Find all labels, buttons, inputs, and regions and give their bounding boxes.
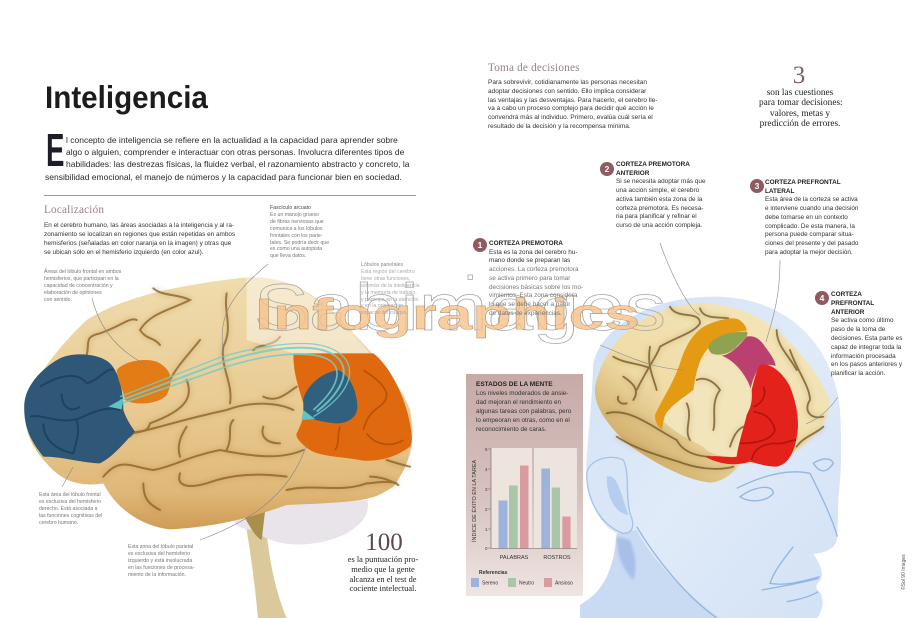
step 4: corteza prefrontal anterior: Se activa como último — [831, 317, 894, 324]
step 1: corteza premotora: de datos de experiencias. — [489, 310, 562, 317]
step 4: corteza prefrontal anterior: ANTERIOR — [831, 309, 864, 316]
text: toma de decisiones: Para sobrevivir, cotidianamente las personas necesitan — [488, 79, 647, 86]
small marker square — [468, 275, 472, 280]
step 2: corteza premotora anterior: 2 — [605, 164, 609, 174]
step 4: corteza prefrontal anterior: paso de la toma de — [831, 326, 885, 333]
caption: áreas del lóbulo frontal: capacidad de concentración y — [44, 283, 113, 289]
text: localización — [44, 222, 235, 256]
region: lateral prefrontal magenta — [722, 336, 776, 388]
sulci — [607, 307, 823, 469]
parietal orange area — [293, 353, 412, 461]
plot background — [491, 448, 532, 548]
caption: fascículo arcuato: Fascículo arcuato — [270, 205, 311, 211]
illustration: left brain with stem and cerebellum — [24, 277, 412, 618]
caption: lóbulo frontal derecho: cerebro humano. — [39, 520, 78, 526]
leader lines — [62, 243, 838, 540]
caption: áreas del lóbulo frontal: elaboración de opiniones — [44, 290, 102, 296]
step 3: corteza prefrontal lateral: 3 — [755, 181, 759, 191]
callout: 100: 100 — [365, 529, 403, 556]
chart title and text: dad mejoran el rendimiento en — [476, 399, 561, 406]
step 3: corteza prefrontal lateral: para adoptar la mejor decisión. — [765, 249, 853, 256]
step 4: corteza prefrontal anterior: capaz de integrar toda la — [831, 344, 901, 351]
intro text: sensibilidad emocional, el manejo de números y la capacidad para funcionar bien en sociedad. — [45, 172, 402, 182]
caption: lóbulos parietales: espacial del cuerpo. — [361, 310, 407, 316]
chart title and text: Los niveles moderados de ansie- — [476, 390, 568, 397]
divider rule — [44, 195, 416, 196]
chart panel — [466, 374, 583, 596]
caption: fascículo arcuato: que lleva datos. — [270, 253, 306, 259]
caption: fascículo arcuato — [270, 205, 329, 259]
chart: Estados de la mente: 4 — [485, 467, 488, 473]
text: localización: En el cerebro humano, las áreas asociadas a la inteligencia y al ra- — [44, 222, 234, 229]
callout: 3: 3 — [793, 62, 805, 89]
y axis label: ÍNDICE DE ÉXITO EN LA TAREA — [471, 459, 478, 542]
step 3: corteza prefrontal lateral: LATERAL — [765, 188, 794, 195]
illustration: right brain with coloured regions — [595, 303, 829, 483]
chart: Estados de la mente — [466, 374, 583, 596]
step 4: corteza prefrontal anterior: PREFRONTAL — [831, 300, 874, 307]
heading: Toma de decisiones: Toma de decisiones — [488, 62, 580, 74]
chart: Estados de la mente: 3 — [485, 487, 488, 493]
chart: Estados de la mente: 2 — [485, 507, 488, 513]
caption: fascículo arcuato: comunica a los lóbulos — [270, 226, 322, 232]
step 1: corteza premotora: acciones. La corteza premotora — [489, 266, 579, 273]
inner cream lobes — [663, 355, 750, 457]
callout text: 100: es la puntuación pro- — [348, 555, 418, 564]
caption: lóbulos parietales: además de la inteligencia — [361, 283, 420, 289]
step 3: corteza prefrontal lateral: complicado. De esta manera, la — [765, 223, 855, 230]
step 4: corteza prefrontal anterior: en los pasos anteriores y — [831, 361, 902, 368]
caption: áreas del lóbulo frontal: Áreas del lóbulo frontal en ambos — [44, 269, 121, 275]
intro text — [45, 135, 410, 182]
step 2: corteza premotora anterior: Si se necesita adoptar más que — [616, 178, 706, 185]
intro text: habilidades: las destrezas físicas, la fluidez verbal, el razonamiento abstracto y concreto, la — [66, 159, 409, 169]
chart title and text: algunas tareas con palabras, pero — [476, 408, 571, 415]
step 1: corteza premotora: CORTEZA PREMOTORA — [489, 240, 563, 247]
caption: lóbulo parietal izquierdo: izquierdo y está involucrada — [128, 558, 192, 564]
callout text: 100: cociente intelectual. — [350, 584, 416, 593]
intro text: algo o alguien, comprender e interactuar con otras personas. Involucra diferentes tipos de — [66, 147, 404, 157]
photo credit: ©Sol 90 Images — [901, 554, 907, 590]
parietal blue area — [303, 370, 357, 423]
caption: fascículo arcuato: Es un manojo grueso — [270, 212, 319, 218]
step 4: corteza prefrontal anterior: información procesada — [831, 353, 896, 360]
caption: lóbulo frontal derecho: Esta área del lóbulo frontal — [39, 492, 101, 498]
step 2: corteza premotora anterior: una acción simple, el cerebro — [616, 187, 699, 194]
caption: fascículo arcuato: es como una autopista — [270, 246, 322, 252]
caption: lóbulos parietales: Esta región del cerebro — [361, 269, 415, 275]
illustration: head profile — [580, 297, 841, 618]
step 3: corteza prefrontal lateral: CORTEZA PREFRONTAL — [765, 179, 841, 186]
legend: Referencias — [479, 570, 508, 576]
caption: fascículo arcuato: tales. Se podría decir que — [270, 240, 329, 246]
bars — [498, 466, 571, 548]
face details — [637, 459, 837, 618]
step 1: corteza premotora: 1 — [478, 240, 482, 250]
step 4: corteza prefrontal anterior: 4 — [820, 293, 824, 303]
step 2: corteza premotora anterior: ria para planificar y refinar el — [616, 213, 697, 220]
x axis labels: ROSTROS — [543, 555, 571, 561]
callout text: 3: son las cuestiones — [767, 88, 833, 98]
step 1: corteza premotora: mano donde se preparan las — [489, 257, 570, 264]
callout text: 100: alcanza en el test de — [350, 575, 416, 584]
callout text: 3: valores, metas y — [770, 109, 830, 119]
legend: Ansioso — [555, 580, 573, 586]
heading: Localización: Localización — [44, 204, 104, 216]
chart: Estados de la mente: 0 — [485, 546, 488, 552]
caption: áreas del lóbulo frontal: hemisferios, que participan en la — [44, 276, 119, 282]
step 1: corteza premotora — [473, 238, 583, 317]
title: Inteligencia — [45, 79, 208, 115]
caption: fascículo arcuato: de fibras nerviosas que — [270, 219, 324, 225]
step 4: corteza prefrontal anterior: CORTEZA — [831, 291, 862, 298]
watermark: Infographics — [255, 290, 640, 339]
cerebellum — [232, 500, 368, 544]
step 4: corteza prefrontal anterior — [815, 291, 902, 377]
caption: lóbulo frontal derecho: las funciones cognitivas del — [39, 513, 102, 519]
step 3: corteza prefrontal lateral: Esta área de la corteza se activa — [765, 196, 858, 203]
caption: lóbulos parietales: y en la orientación — [361, 303, 403, 309]
haze under watermark — [247, 278, 370, 353]
chart title and text: ESTADOS DE LA MENTE — [476, 381, 553, 388]
step 2: corteza premotora anterior — [600, 161, 706, 229]
step 1: corteza premotora: Esta es la zona del cerebro hu- — [489, 249, 577, 256]
watermark: Sabimages — [254, 270, 666, 344]
caption: fascículo arcuato: frontales con los parie- — [270, 233, 322, 239]
step 1: corteza premotora: vimientos. Esta zona considera — [489, 292, 577, 299]
chart: Estados de la mente: 1 — [485, 527, 488, 533]
step 3: corteza prefrontal lateral: debe tomarse en un contexto — [765, 214, 848, 221]
step 2: corteza premotora anterior: activa también esta zona de la — [616, 196, 702, 203]
callout text: 3 — [759, 88, 843, 129]
callout text: 100: medio que la gente — [351, 565, 415, 574]
caption: áreas del lóbulo frontal — [44, 268, 122, 303]
step 1: corteza premotora: se activa primero para tomar — [489, 275, 570, 282]
region: anterior prefrontal red — [705, 364, 798, 467]
step 1: corteza premotora: lo que se debe hacer a partir — [489, 301, 570, 308]
step 2: corteza premotora anterior: ANTERIOR — [616, 170, 649, 177]
caption: lóbulos parietales: y participa en la atención — [361, 297, 418, 303]
caption: lóbulos parietales: y la memoria de trabajo, — [361, 290, 417, 296]
legend — [471, 570, 573, 587]
caption: lóbulos parietales — [361, 262, 420, 316]
text: localización: zonamiento se localizan en regiones que están repetidas en ambos — [44, 231, 235, 238]
caption: lóbulo parietal izquierdo: es exclusiva del hemisferio — [128, 551, 190, 557]
text: localización: hemisferios (señaladas en color naranja en la imagen) y otras que — [44, 240, 231, 247]
callout text: 3: predicción de errores. — [760, 119, 840, 129]
callout text: 3: para tomar decisiones: — [759, 98, 843, 108]
text: toma de decisiones: convendrá más al individuo. Primero, evalúa cuál sería el — [488, 114, 653, 121]
text: toma de decisiones: las ventajas y las desventajas. Para hacerlo, el cerebro lle- — [488, 97, 657, 104]
axis — [488, 448, 577, 548]
caption: áreas del lóbulo frontal: con sentido. — [44, 297, 72, 303]
caption: lóbulo frontal derecho: derecho. Está asociada a — [39, 506, 98, 512]
brain body — [24, 277, 412, 529]
chart: Estados de la mente: 5 — [485, 447, 488, 453]
text: toma de decisiones: va a cabo un proceso complejo para decidir qué acción le — [488, 105, 654, 112]
frontal blue area — [24, 354, 135, 463]
step 2: corteza premotora anterior: curso de una acción compleja. — [616, 222, 702, 229]
legend: Sereno — [482, 580, 498, 586]
brain body — [595, 303, 829, 483]
text: toma de decisiones: adoptar decisiones con sentido. Ello implica considerar — [488, 88, 646, 95]
chart title and text: reconocimiento de caras. — [476, 426, 546, 433]
step 4: corteza prefrontal anterior: planificar la acción. — [831, 370, 885, 377]
step 1: corteza premotora: decisiones básicas sobre los mo- — [489, 284, 583, 291]
caption: lóbulo parietal izquierdo: miento de la información. — [128, 572, 186, 578]
caption: lóbulo parietal izquierdo: Esta zona del lóbulo parietal — [128, 544, 193, 550]
step 3: corteza prefrontal lateral — [750, 179, 858, 256]
drop cap: E — [46, 124, 64, 176]
step 4: corteza prefrontal anterior: decisiones. Esta parte es — [831, 335, 902, 342]
caption: lóbulo frontal derecho: es exclusiva del hemisferio — [39, 499, 101, 505]
step 3: corteza prefrontal lateral: persona puede comparar situa- — [765, 231, 854, 238]
text: toma de decisiones — [488, 79, 658, 130]
text: toma de decisiones: resultado de la decisión y la recompensa mínima. — [488, 123, 631, 130]
caption: lóbulos parietales: tiene otras funciones, — [361, 276, 410, 282]
ear — [587, 457, 633, 533]
step 3: corteza prefrontal lateral: ciones del presente y del pasado — [765, 240, 858, 247]
region: anterior premotor green — [708, 332, 748, 355]
chart title and text: lo empeoran en otras, como en el — [476, 417, 570, 424]
chart title and text — [476, 381, 571, 433]
x axis labels: PALABRAS — [500, 555, 529, 561]
frontal orange area — [117, 360, 171, 404]
caption: lóbulos parietales: Lóbulos parietales — [361, 262, 403, 268]
intro text: l concepto de inteligencia se refiere en la actualidad a la capacidad para aprender sobre — [66, 135, 398, 145]
sulci — [87, 288, 410, 510]
brain stem — [243, 510, 287, 618]
step 3: corteza prefrontal lateral: e interviene cuando una decisión — [765, 205, 858, 212]
callout text: 100 — [348, 555, 418, 593]
caption: lóbulo frontal derecho — [39, 492, 102, 526]
caption: lóbulo parietal izquierdo: en las funciones de procesa- — [128, 565, 194, 571]
step 2: corteza premotora anterior: CORTEZA PREMOTORA — [616, 161, 690, 168]
caption: lóbulo parietal izquierdo — [128, 544, 194, 578]
x axis labels — [500, 555, 571, 561]
step 2: corteza premotora anterior: corteza premotora. Es necesa- — [616, 205, 703, 212]
region: premotor orange — [655, 318, 747, 429]
text: localización: se ubican sólo en el hemisferio izquierdo (en color azul). — [44, 249, 204, 256]
legend: Neutro — [519, 580, 534, 586]
arrows between frontal and parietal lobes — [120, 344, 350, 417]
